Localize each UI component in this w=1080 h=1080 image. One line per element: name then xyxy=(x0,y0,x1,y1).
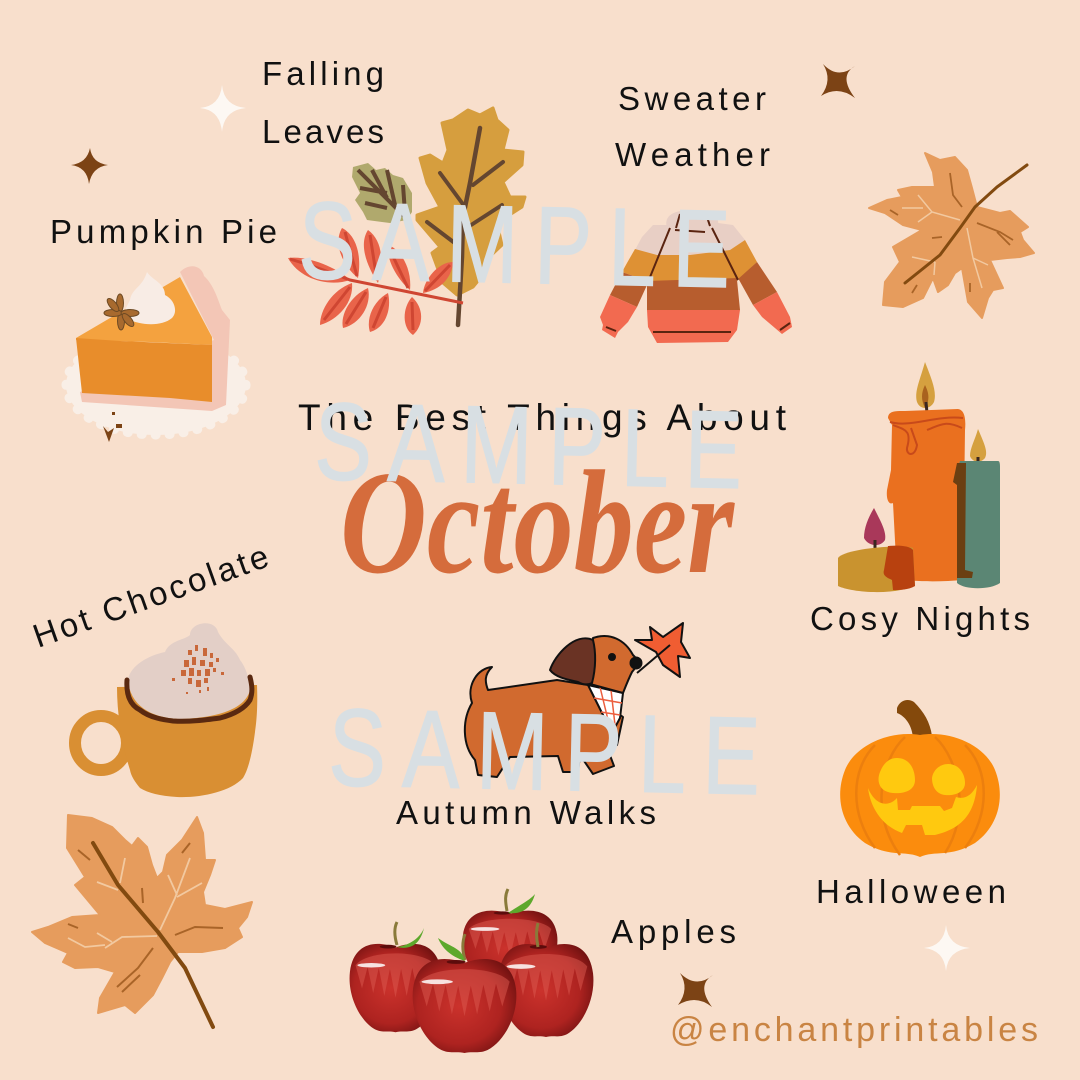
green candle xyxy=(957,461,1000,588)
label: falling leaves: Leaves xyxy=(262,113,384,150)
bandana check lines xyxy=(594,687,622,728)
icon: brown sparkle bottom xyxy=(678,973,713,1007)
apple left xyxy=(350,944,441,1032)
watermark: sample bottom: SAMPLE xyxy=(328,686,761,817)
big candle xyxy=(887,409,965,581)
red leaf xyxy=(288,258,350,283)
crumbs xyxy=(103,412,122,442)
nose xyxy=(630,658,642,668)
label: apples: Apples xyxy=(611,913,736,950)
head xyxy=(590,636,640,693)
bandana xyxy=(588,685,623,733)
small flame xyxy=(864,508,885,545)
cup xyxy=(117,685,257,797)
icon: white sparkle top left xyxy=(200,85,246,132)
grin xyxy=(868,785,977,835)
oak leaf xyxy=(417,108,525,295)
label: falling leaves: Falling xyxy=(262,55,384,92)
label: hot chocolate: Hot Chocolate xyxy=(28,537,273,655)
apple back xyxy=(463,911,557,987)
label: cosy nights: Cosy Nights xyxy=(810,600,1030,637)
title: october: October xyxy=(340,441,735,605)
icon: dachshund with maple leaf xyxy=(465,623,690,777)
body and tail xyxy=(465,667,623,777)
filling side xyxy=(76,338,212,402)
icon: red apples xyxy=(350,889,593,1053)
icon: maple leaf top right xyxy=(869,153,1034,318)
label: pumpkin pie: Pumpkin Pie xyxy=(50,213,277,250)
green leaf xyxy=(352,163,412,223)
apple front xyxy=(413,959,516,1053)
icon: brown sparkle top right xyxy=(821,64,855,98)
maple leaf xyxy=(635,623,690,677)
doily xyxy=(66,335,246,435)
icon: maple leaf bottom left xyxy=(32,815,252,1027)
green flame xyxy=(970,429,986,462)
icon: hot chocolate mug xyxy=(75,623,257,797)
label: sweater weather xyxy=(615,80,770,173)
pale yoke xyxy=(635,223,745,256)
heading: the best things about: The Best Things About xyxy=(298,397,787,438)
rim xyxy=(127,677,252,721)
ear xyxy=(550,638,595,684)
coral stripes xyxy=(600,295,637,338)
label: sweater weather: Weather xyxy=(615,136,770,173)
apple right xyxy=(499,944,593,1037)
handle xyxy=(75,716,127,770)
brown stripe xyxy=(610,262,777,310)
filling top xyxy=(76,277,212,345)
orange stripe xyxy=(622,240,757,281)
stem xyxy=(897,700,932,738)
small candle xyxy=(838,546,915,592)
icon: autumn leaves bunch xyxy=(288,108,525,335)
icon: white sparkle bottom right xyxy=(924,925,970,971)
icon: striped sweater xyxy=(600,210,792,343)
watermark: sample top: SAMPLE xyxy=(298,179,731,310)
eyes xyxy=(879,758,915,793)
label: sweater weather: Sweater xyxy=(618,80,766,117)
icon: jack-o-lantern pumpkin xyxy=(840,700,1000,857)
lobes xyxy=(856,737,984,855)
label: halloween: Halloween xyxy=(816,873,1006,910)
label: falling leaves xyxy=(262,55,384,150)
icon: brown sparkle left xyxy=(71,148,108,184)
neck xyxy=(666,210,718,232)
watermark: sample middle: SAMPLE xyxy=(314,380,743,511)
label: autumn walks: Autumn Walks xyxy=(396,794,656,831)
big flame xyxy=(916,362,935,408)
credit handle: @enchantprintables xyxy=(670,1011,1038,1049)
pumpkin body xyxy=(840,734,1000,857)
crust xyxy=(80,266,230,411)
knit lines xyxy=(606,214,790,332)
foam xyxy=(128,623,250,719)
icon: candles xyxy=(838,362,1000,592)
star anise xyxy=(104,294,139,330)
whipped cream xyxy=(122,272,175,324)
cinnamon xyxy=(172,645,224,694)
icon: pumpkin pie slice xyxy=(66,266,246,442)
